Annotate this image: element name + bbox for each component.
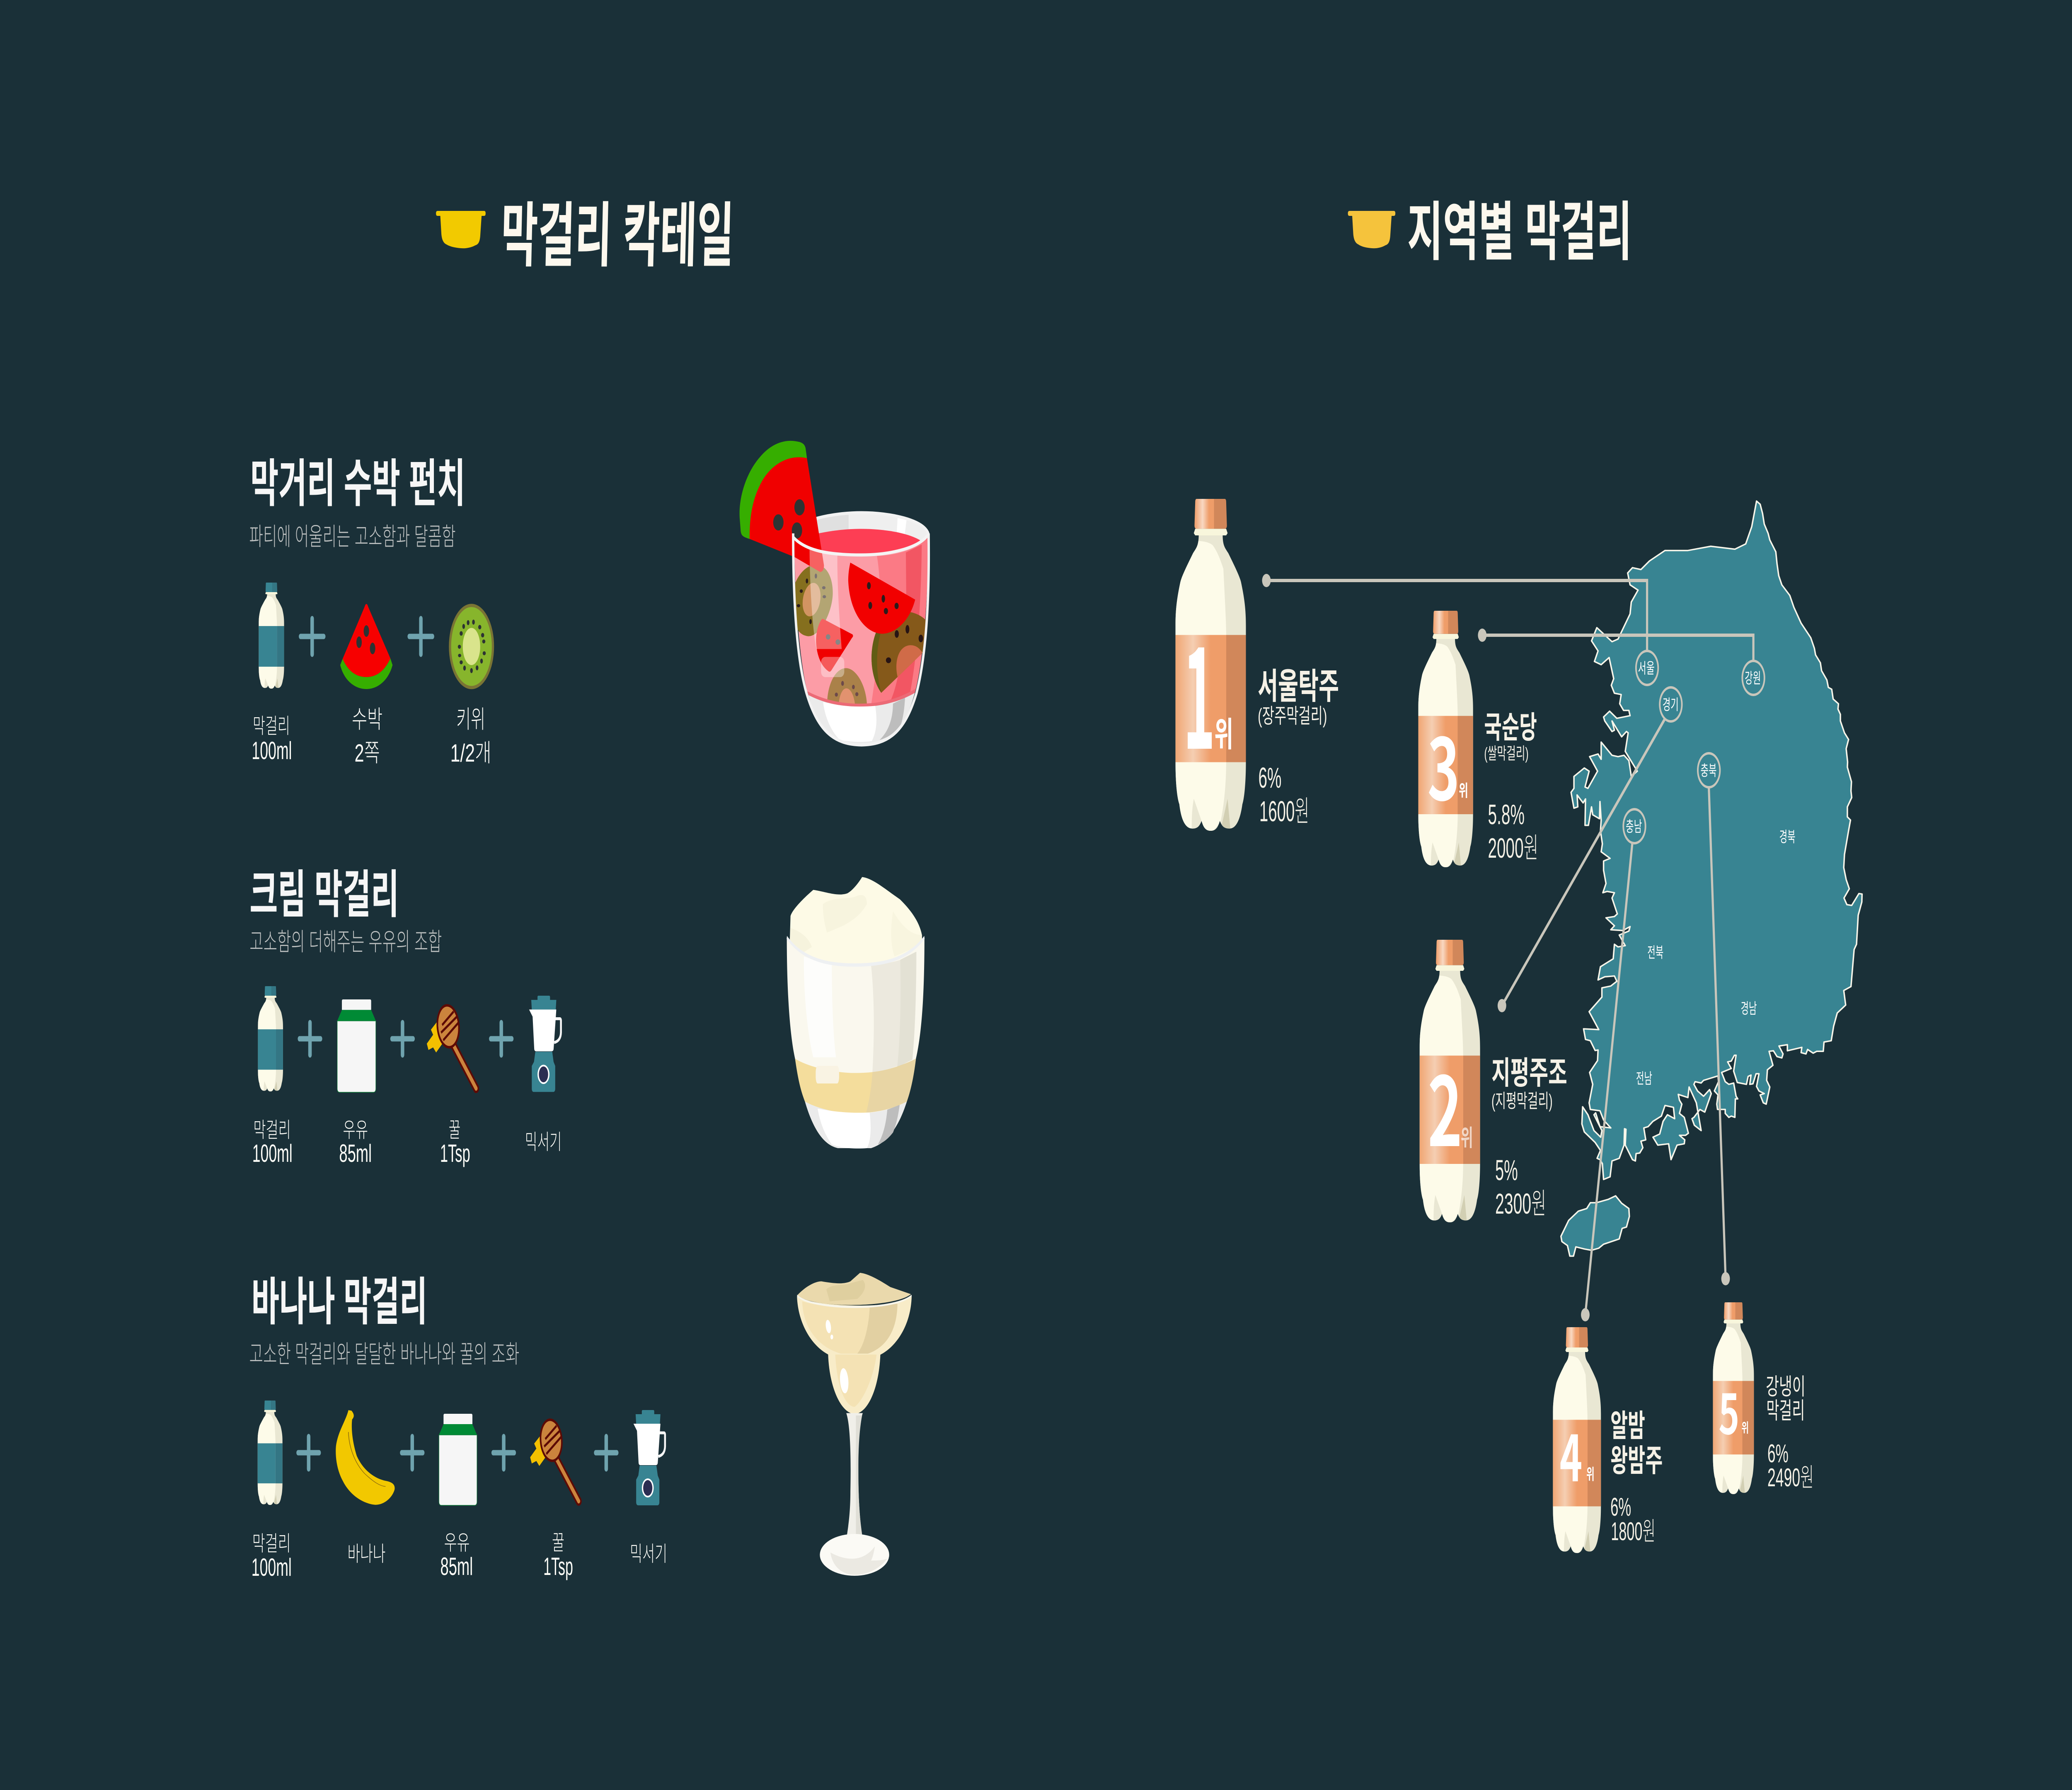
abv: 5% <box>1495 1154 1518 1186</box>
icon: yellow pot <box>436 211 486 248</box>
label: milk 85ml: 우유 <box>343 1118 368 1142</box>
label: makgeolli 100ml <box>252 714 292 764</box>
icon: honey dipper <box>530 1417 579 1501</box>
marker: Chungbuk: 충북 <box>1701 763 1717 779</box>
label: honey 1Tsp: 꿀 <box>552 1531 564 1555</box>
panel: cream makgeolli recipe <box>249 866 562 1167</box>
icon: milk carton <box>337 999 376 1092</box>
region markers <box>1623 651 1796 1087</box>
marker: Gyeonggi <box>1660 687 1682 721</box>
label: Jeonnam: 전남 <box>1636 1071 1652 1087</box>
bottle <box>1174 499 1246 834</box>
recipe description: 파티에 어울리는 고소함과 달콤함 <box>249 522 456 551</box>
label: makgeolli 100ml: 막걸리 <box>253 714 290 738</box>
icon: plus <box>300 619 324 654</box>
bottle <box>1418 940 1480 1225</box>
rank numeral: 3 <box>1428 701 1460 825</box>
recipe description: 고소함의 더해주는 우유의 조합 <box>249 928 442 956</box>
label: makgeolli 100ml <box>252 1532 292 1581</box>
icon: watermelon slice <box>340 604 392 689</box>
name: 지평주조 <box>1491 1055 1567 1091</box>
icon: plus <box>298 1437 319 1469</box>
name line 2: 막걸리 <box>1766 1398 1805 1424</box>
rank numeral: 1 <box>1183 590 1215 789</box>
icon: makgeolli bottle <box>257 986 283 1093</box>
label: blender: 믹서기 <box>525 1130 562 1154</box>
name line 1: 알밤 <box>1610 1409 1645 1444</box>
label: watermelon 2 pieces: 수박 <box>352 705 382 733</box>
illustration: watermelon punch glass <box>740 441 929 745</box>
icon: honey dipper <box>427 1002 476 1089</box>
label: Gyeongbuk: 경북 <box>1779 829 1796 845</box>
label: milk 85ml: 85ml <box>440 1552 473 1580</box>
marker: Chungnam <box>1623 809 1646 843</box>
icon: yellow pot <box>1348 211 1395 248</box>
label: watermelon 2 pieces: 2쪽 <box>354 739 380 767</box>
price: 1600원 <box>1259 795 1310 827</box>
price: 2300원 <box>1495 1188 1546 1220</box>
marker: Gangwon: 강원 <box>1745 670 1761 687</box>
leader: rank 4 to Chungnam <box>1585 844 1632 1315</box>
ranking 2: Jipyeong <box>1418 940 1567 1225</box>
label: honey 1Tsp: 1Tsp <box>440 1139 470 1167</box>
marker: Gangwon <box>1742 661 1765 695</box>
heading: cocktail section <box>436 197 735 276</box>
product: (지평막걸리) <box>1491 1091 1553 1112</box>
leader: rank 1 to Seoul <box>1266 581 1647 651</box>
label: watermelon 2 pieces <box>352 705 382 767</box>
rank suffix: 위 <box>1461 1119 1473 1153</box>
label: Gyeongnam: 경남 <box>1741 1001 1757 1017</box>
label: honey 1Tsp: 1Tsp <box>543 1552 573 1580</box>
ranking 4: Albam Wangbamju <box>1552 1327 1663 1555</box>
product: (쌀막걸리) <box>1484 744 1529 763</box>
rank numeral: 5 <box>1719 1371 1739 1450</box>
icon: plus <box>402 1437 423 1469</box>
recipe description: 고소한 막걸리와 달달한 바나나와 꿀의 조화 <box>249 1340 519 1368</box>
illustration: cream makgeolli glass <box>787 877 925 1149</box>
recipe heading: 바나나 막걸리 <box>252 1274 427 1331</box>
map: mainland <box>1571 501 1862 1180</box>
recipe heading: 막거리 수박 펀치 <box>250 455 465 513</box>
bottle <box>1417 611 1473 870</box>
ranking 3: Guksoondang <box>1417 611 1538 870</box>
label: milk 85ml: 85ml <box>339 1139 372 1167</box>
label: makgeolli 100ml: 100ml <box>252 1139 293 1167</box>
icon: blender <box>634 1410 665 1505</box>
label: blender: 믹서기 <box>630 1542 667 1566</box>
panel: banana makgeolli recipe <box>249 1274 667 1581</box>
abv: 6% <box>1767 1439 1789 1468</box>
panel: watermelon punch recipe <box>249 455 494 767</box>
icon: milk carton <box>439 1414 477 1505</box>
label: makgeolli 100ml: 막걸리 <box>253 1118 291 1142</box>
label: honey 1Tsp <box>543 1531 573 1580</box>
label: milk 85ml <box>339 1118 372 1167</box>
rank numeral: 2 <box>1428 1035 1462 1173</box>
name: 서울탁주 <box>1258 667 1339 706</box>
rank suffix: 위 <box>1586 1462 1595 1484</box>
label: Jeonbuk: 전북 <box>1647 945 1663 961</box>
icon: makgeolli bottle <box>258 583 284 689</box>
icon: plus <box>493 1437 514 1469</box>
label: kiwi half: 키위 <box>456 705 485 733</box>
label: honey 1Tsp: 꿀 <box>449 1118 460 1142</box>
label: milk 85ml <box>440 1531 473 1580</box>
label: kiwi half <box>450 705 491 767</box>
icon: plus <box>300 1023 320 1055</box>
marker: Gyeonggi: 경기 <box>1663 697 1679 713</box>
rank suffix: 위 <box>1459 777 1468 801</box>
label: milk 85ml: 우유 <box>444 1531 470 1555</box>
icon: banana <box>336 1410 395 1505</box>
name: 국순당 <box>1484 711 1537 745</box>
leader lines <box>1266 581 1753 1315</box>
bottle <box>1552 1327 1601 1555</box>
price: 2490원 <box>1767 1463 1814 1492</box>
marker: Seoul: 서울 <box>1638 660 1655 677</box>
price: 1800원 <box>1611 1517 1656 1546</box>
bottle <box>1712 1302 1754 1496</box>
rank suffix: 위 <box>1214 707 1233 756</box>
heading: regional section <box>1348 196 1632 268</box>
label: makgeolli 100ml: 100ml <box>252 736 292 764</box>
icon: blender <box>529 996 561 1092</box>
icon: makgeolli bottle <box>257 1401 283 1506</box>
icon: plus <box>596 1437 617 1469</box>
marker: Chungnam: 충남 <box>1626 819 1642 835</box>
illustration: banana makgeolli glass <box>797 1273 912 1576</box>
rank numeral: 4 <box>1560 1408 1582 1500</box>
name line 2: 왕밤주 <box>1610 1444 1663 1478</box>
title: makgeolli cocktail: 막걸리 칵테일 <box>500 197 735 276</box>
map of South Korea <box>1561 501 1862 1256</box>
leader: rank 2 to Gyeonggi <box>1502 719 1665 1006</box>
marker: Seoul <box>1636 651 1658 685</box>
label: honey 1Tsp <box>440 1118 470 1167</box>
abv: 6% <box>1258 762 1281 794</box>
price: 2000원 <box>1488 833 1538 864</box>
rank suffix: 위 <box>1741 1417 1749 1436</box>
ranking 1: Seoul Takju <box>1174 499 1339 834</box>
marker: Chungbuk <box>1698 753 1720 787</box>
product: (장주막걸리) <box>1258 704 1327 728</box>
leader: rank 5 to Chungbuk <box>1709 788 1726 1278</box>
title: regional makgeolli: 지역별 막걸리 <box>1407 196 1632 268</box>
icon: plus <box>409 619 433 654</box>
leader end dots <box>1262 574 1730 1321</box>
leader: rank 3 to Gangwon <box>1482 635 1753 660</box>
icon: kiwi <box>449 604 494 689</box>
name line 1: 강냉이 <box>1766 1374 1806 1400</box>
label: banana: 바나나 <box>348 1542 385 1566</box>
label: kiwi half: 1/2개 <box>450 739 491 767</box>
icon: plus <box>392 1023 413 1055</box>
map: Jeju island <box>1561 1196 1629 1256</box>
ranking 5: Gangnaengi makgeolli <box>1712 1302 1814 1496</box>
abv: 6% <box>1610 1493 1631 1522</box>
recipe heading: 크림 막걸리 <box>249 866 399 924</box>
abv: 5.8% <box>1488 799 1525 830</box>
label: makgeolli 100ml <box>252 1118 293 1167</box>
label: makgeolli 100ml: 막걸리 <box>252 1532 291 1556</box>
icon: plus <box>491 1023 512 1055</box>
label: makgeolli 100ml: 100ml <box>252 1553 292 1581</box>
